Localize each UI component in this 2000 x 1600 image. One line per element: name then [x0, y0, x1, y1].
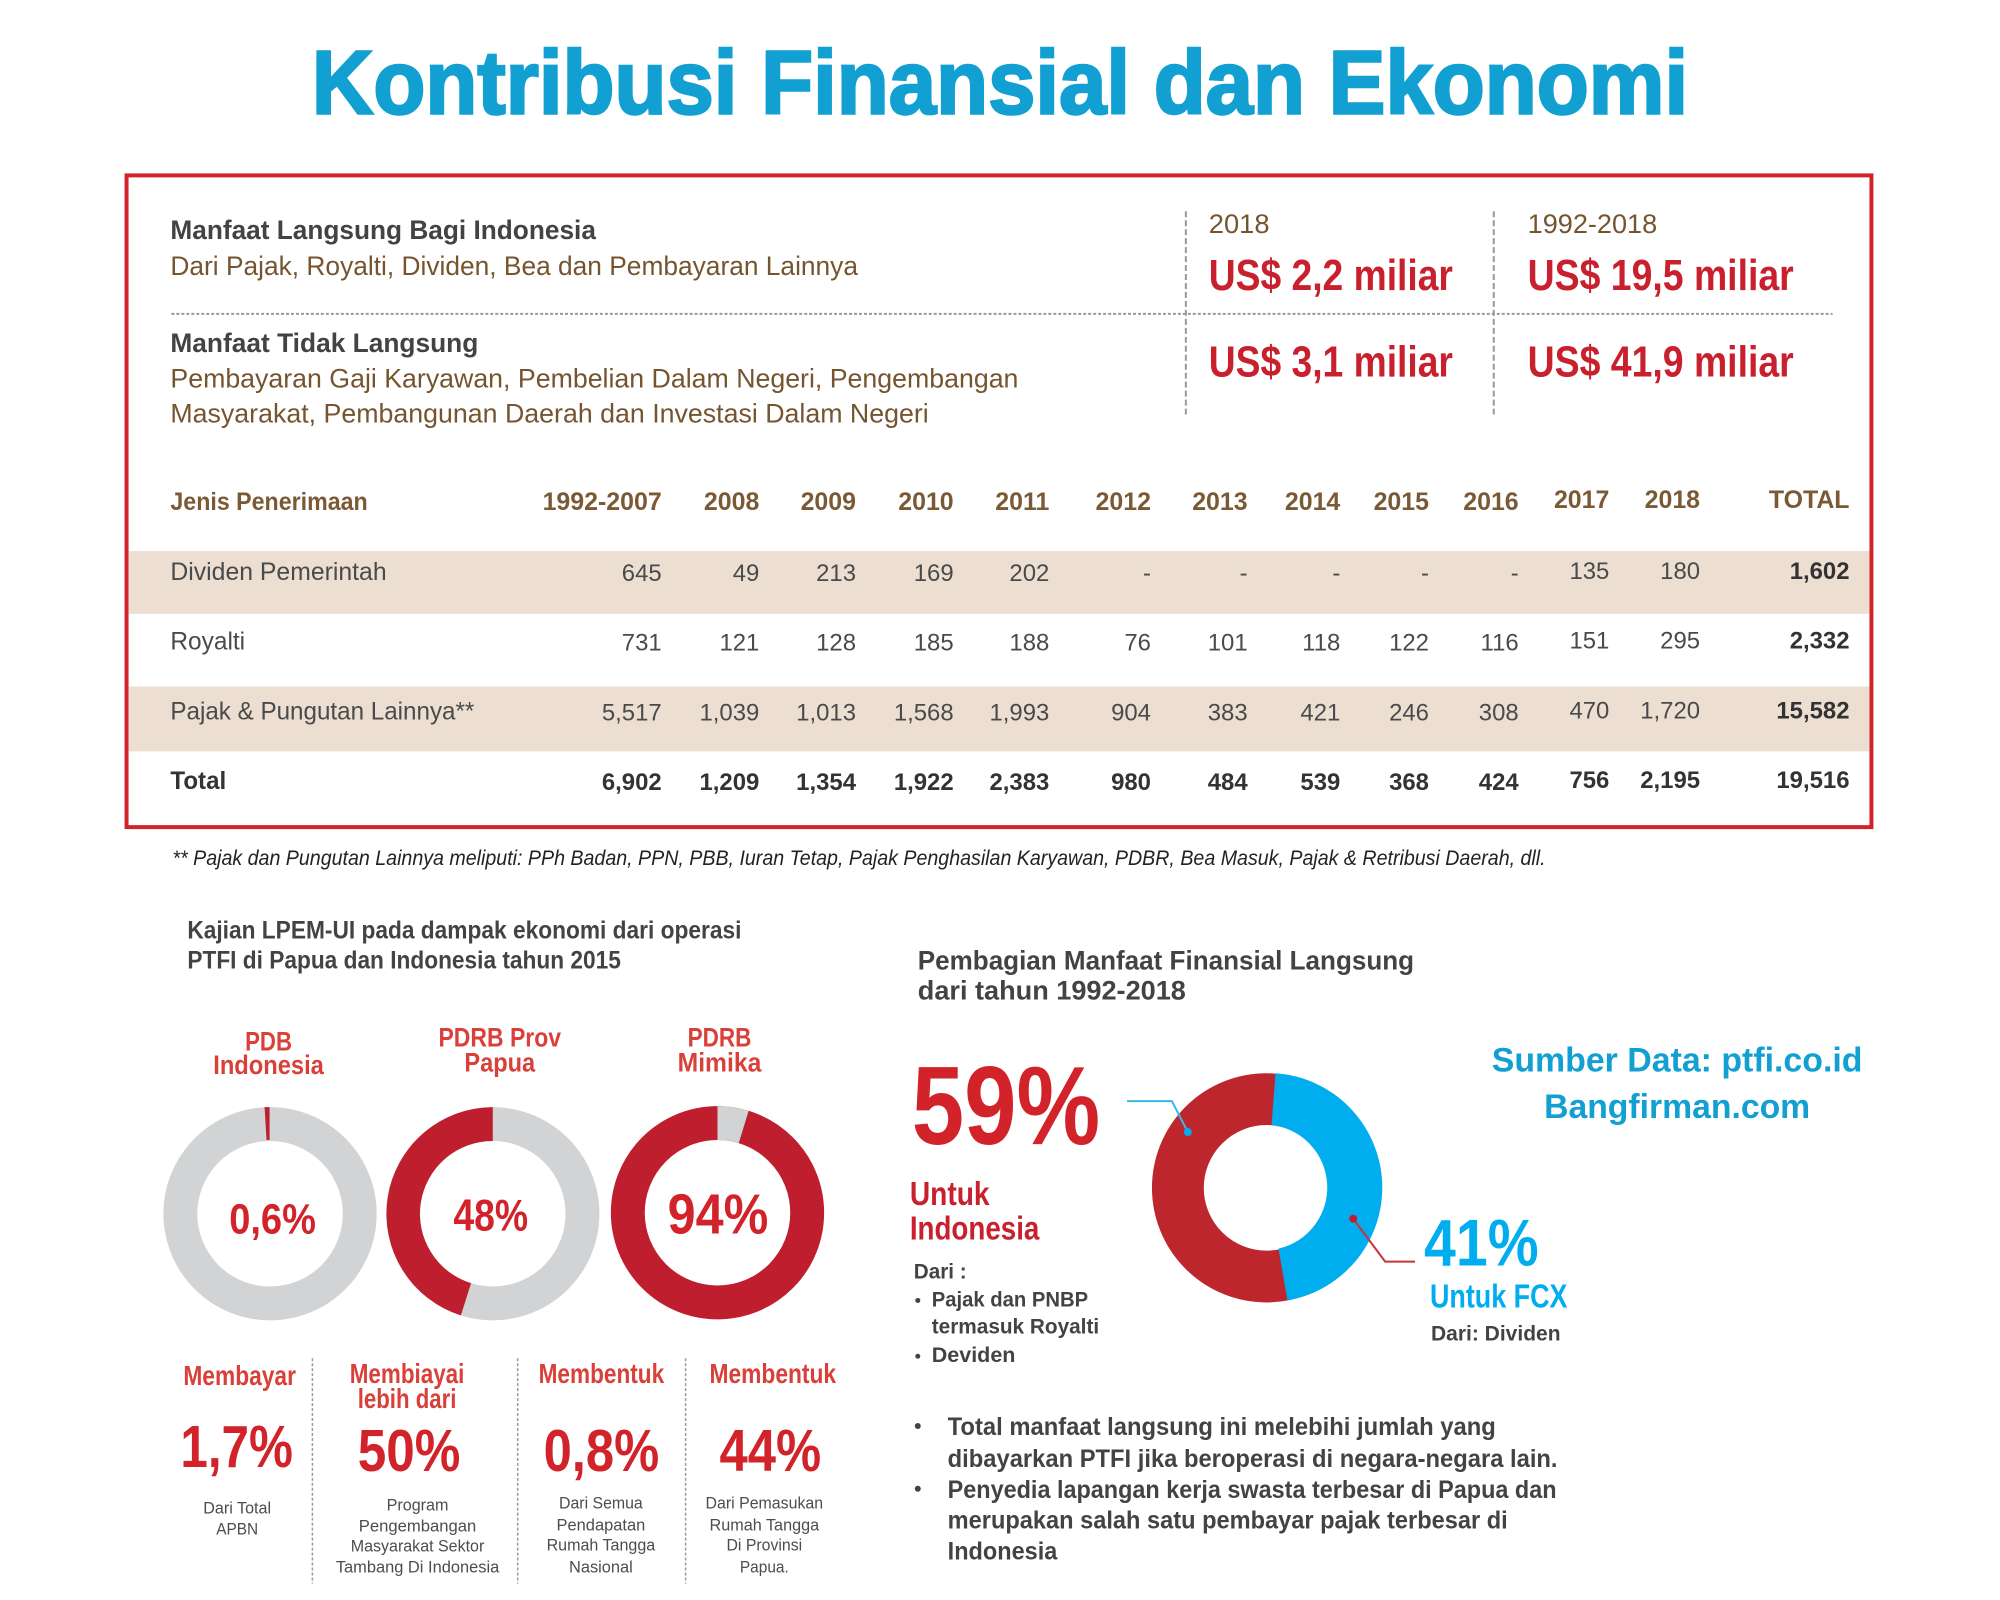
text block: indirect benefits	[170, 328, 1018, 429]
table header: 2009	[801, 488, 856, 516]
table row: dividen: -	[1332, 560, 1340, 587]
stat: 1,7% APBN: Dari Total	[203, 1499, 271, 1518]
text block: indirect benefits: Masyarakat, Pembangunan Daerah dan Investasi Dalam Negeri	[170, 399, 929, 429]
table row: total: 756	[1569, 767, 1609, 794]
table header: 2018	[1645, 486, 1700, 514]
stat: 44% Papua household income: 44%	[719, 1417, 821, 1484]
stat: 0,8% national household income: Rumah Tangga	[547, 1536, 656, 1555]
stat: 44% Papua household income: Membentuk	[710, 1358, 836, 1389]
stat: 0,8% national household income: Membentuk	[539, 1358, 665, 1389]
callout: 59% for Indonesia: Deviden	[932, 1344, 1015, 1367]
donut: PDB Indonesia 0,6%: PDB	[245, 1026, 292, 1056]
callout: 59% for Indonesia: 59%	[912, 1043, 1100, 1168]
callout: 59% for Indonesia: Dari :	[914, 1261, 967, 1284]
arrow: leader to blue segment	[1349, 1215, 1415, 1262]
stat: 44% Papua household income: Papua.	[740, 1557, 789, 1576]
table row: pajak: 15,582	[1776, 697, 1850, 724]
table row: dividen: -	[1511, 560, 1519, 587]
donut: PDB Indonesia 0,6%: 0,6%	[229, 1196, 316, 1244]
stat: 44% Papua household income: Dari Pemasukan	[706, 1494, 823, 1513]
stat: 50% program: Tambang Di Indonesia	[336, 1557, 500, 1576]
callout: 41% for FCX: 41%	[1424, 1206, 1539, 1280]
values: 2018	[1209, 209, 1453, 387]
donut: PDB Indonesia 0,6%: Indonesia	[213, 1050, 325, 1080]
table row: royalti: 128	[816, 630, 856, 657]
table header: 2014	[1285, 488, 1340, 516]
table row: royalti: Royalti	[170, 628, 245, 656]
heading: direct financial benefit split	[918, 946, 1414, 1006]
callout: 41% for FCX: Untuk FCX	[1430, 1277, 1568, 1314]
table header: 2011	[995, 488, 1049, 516]
table row: total: 484	[1208, 769, 1248, 796]
table row: pajak: 470	[1569, 697, 1609, 724]
donut: PDRB Mimika 94%: 94%	[668, 1184, 768, 1247]
donut: PDRB Prov Papua 48%: Papua	[464, 1047, 536, 1077]
row bands	[129, 551, 1869, 751]
table row: dividen: 213	[816, 560, 856, 587]
table row: pajak: 308	[1479, 699, 1519, 726]
table header: 2016	[1463, 488, 1519, 516]
text block: key points	[915, 1413, 1558, 1566]
values: 2018: 2018	[1209, 209, 1270, 239]
table row: dividen: -	[1143, 560, 1151, 587]
stat: 1,7% APBN: 1,7%	[180, 1413, 293, 1480]
table header: 2010	[898, 488, 954, 516]
table row: total: Total	[170, 767, 226, 795]
table header: 2015	[1374, 488, 1429, 516]
table row: dividen: 169	[914, 560, 954, 587]
callout: 59% for Indonesia: Indonesia	[910, 1210, 1040, 1247]
footnote: ** Pajak dan Pungutan Lainnya meliputi: PPh Badan, PPN, PBB, Iuran Tetap, Pajak Penghasilan Karyawan, PDBR, Bea Masuk, Pajak & Retribusi Daerah, dll.	[172, 847, 1546, 870]
stat: 0,8% national household income: 0,8%	[544, 1417, 659, 1484]
table row: royalti: 151	[1569, 628, 1609, 655]
table header: 2013	[1192, 488, 1248, 516]
arrow: leader to red segment	[1127, 1101, 1192, 1136]
callout: 59% for Indonesia: Pajak dan PNBP	[932, 1288, 1088, 1311]
table row: total: 6,902	[602, 769, 662, 796]
table row: pajak: Pajak & Pungutan Lainnya**	[170, 697, 475, 725]
values: 1992-2018: US$ 41,9 miliar	[1528, 338, 1794, 387]
table row: dividen: Dividen Pemerintah	[170, 558, 387, 586]
donut: PDRB Mimika 94%	[628, 1022, 807, 1302]
text block: indirect benefits: Manfaat Tidak Langsung	[170, 328, 478, 358]
table header: 2012	[1096, 488, 1151, 516]
text block: direct benefits	[170, 215, 858, 281]
table row: royalti: 121	[719, 630, 759, 657]
stat: 50% program	[336, 1358, 500, 1576]
table row: total	[170, 767, 1850, 796]
donut: PDRB Mimika 94%: PDRB	[688, 1022, 751, 1052]
table row: dividen	[170, 558, 1850, 587]
table row: total: 19,516	[1776, 767, 1850, 794]
heading: direct financial benefit split: Pembagian Manfaat Finansial Langsung	[918, 946, 1414, 976]
table row: pajak: 1,993	[989, 699, 1049, 726]
table header: 2017	[1554, 486, 1609, 514]
table row: total: 1,209	[700, 769, 759, 796]
text block: key points: Total manfaat langsung ini melebihi jumlah yang	[948, 1413, 1496, 1441]
text block: data source	[1492, 1041, 1862, 1126]
table row: royalti: 731	[622, 630, 662, 657]
stat: 44% Papua household income: Rumah Tangga	[710, 1516, 820, 1535]
callout: 59% for Indonesia: Untuk	[910, 1175, 990, 1212]
donut: PDB Indonesia 0,6%	[180, 1026, 360, 1303]
table row: royalti: 116	[1481, 630, 1519, 657]
table row: pajak: 246	[1389, 699, 1429, 726]
stat: 0,8% national household income: Nasional	[569, 1557, 633, 1576]
donut: PDRB Mimika 94%: Mimika	[678, 1047, 762, 1077]
table row: royalti: 295	[1660, 628, 1700, 655]
values: 2018: US$ 3,1 miliar	[1209, 338, 1453, 387]
table row: total: 2,383	[989, 769, 1049, 796]
donut: PDRB Prov Papua 48%: PDRB Prov	[438, 1022, 561, 1052]
table row: royalti: 2,332	[1790, 628, 1850, 655]
table row: dividen: 180	[1660, 558, 1700, 585]
heading: LPEM-UI study	[187, 917, 741, 975]
stat: 1,7% APBN: APBN	[216, 1520, 258, 1539]
text block: data source: Sumber Data: ptfi.co.id	[1492, 1041, 1862, 1079]
stat: 0,8% national household income: Dari Semua	[559, 1494, 643, 1513]
stat: 44% Papua household income: Di Provinsi	[726, 1536, 802, 1555]
table row: total: 1,354	[796, 769, 857, 796]
values: 1992-2018: US$ 19,5 miliar	[1528, 251, 1794, 300]
callout: 41% for FCX	[1424, 1206, 1568, 1345]
donut: PDRB Prov Papua 48%	[386, 1022, 582, 1315]
stat: 1,7% APBN: Membayar	[183, 1360, 296, 1391]
stat: 50% program: Program	[387, 1496, 448, 1515]
text block: key points: merupakan salah satu pembayar pajak terbesar di	[948, 1507, 1508, 1535]
donut: PDRB Prov Papua 48%: 48%	[453, 1190, 528, 1241]
text block: indirect benefits: Pembayaran Gaji Karyawan, Pembelian Dalam Negeri, Pengembangan	[170, 364, 1018, 394]
table row: dividen: -	[1240, 560, 1248, 587]
table row: dividen: 202	[1009, 560, 1049, 587]
callout: 59% for Indonesia	[910, 1043, 1100, 1367]
panel: financial table	[127, 175, 1871, 827]
table row: dividen: 49	[733, 560, 759, 587]
table row: total: 980	[1111, 769, 1151, 796]
table header: Jenis Penerimaan	[170, 488, 368, 516]
table header: 2008	[704, 488, 759, 516]
stat: 44% Papua household income	[706, 1358, 836, 1576]
stat: 50% program: Pengembangan	[359, 1517, 476, 1536]
table row: pajak: 383	[1208, 699, 1248, 726]
table row: pajak: 5,517	[602, 699, 662, 726]
table row: royalti	[170, 628, 1850, 657]
text block: data source: Bangfirman.com	[1544, 1088, 1810, 1126]
stat: 0,8% national household income	[539, 1358, 665, 1576]
table row: royalti: 122	[1389, 630, 1429, 657]
text block: direct benefits: Manfaat Langsung Bagi Indonesia	[170, 215, 597, 245]
stat: 1,7% APBN	[180, 1360, 296, 1539]
text block: key points: dibayarkan PTFI jika beroperasi di negara-negara lain.	[948, 1445, 1558, 1473]
callout: 59% for Indonesia: termasuk Royalti	[932, 1315, 1099, 1338]
table row: royalti: 118	[1302, 630, 1340, 657]
table row: pajak: 1,013	[796, 699, 856, 726]
values: 2018: US$ 2,2 miliar	[1209, 251, 1453, 300]
table row: royalti: 101	[1208, 630, 1248, 657]
table row: pajak: 904	[1111, 699, 1151, 726]
table row: royalti: 188	[1009, 630, 1049, 657]
table header: 1992-2007	[543, 488, 662, 516]
table row: total: 1,922	[894, 769, 954, 796]
values: 1992-2018: 1992-2018	[1528, 209, 1657, 239]
text block: direct benefits: Dari Pajak, Royalti, Dividen, Bea dan Pembayaran Lainnya	[170, 251, 858, 281]
table row: dividen: 135	[1569, 558, 1609, 585]
stat: 50% program: Membiayai	[350, 1358, 464, 1389]
stat: 50% program: lebih dari	[358, 1383, 456, 1414]
heading: direct financial benefit split: dari tahun 1992-2018	[918, 976, 1186, 1006]
text block: key points: Penyedia lapangan kerja swasta terbesar di Papua dan	[948, 1476, 1557, 1504]
table row: royalti: 185	[914, 630, 954, 657]
table row: pajak: 1,568	[894, 699, 954, 726]
table row: dividen: -	[1421, 560, 1429, 587]
table row: total: 2,195	[1640, 767, 1700, 794]
stat: 0,8% national household income: Pendapatan	[557, 1516, 645, 1535]
table row: dividen: 645	[622, 560, 662, 587]
table header: TOTAL	[1769, 486, 1850, 514]
title: Kontribusi Finansial dan Ekonomi	[312, 34, 1688, 134]
table row: total: 368	[1389, 769, 1429, 796]
table row: pajak: 1,039	[700, 699, 759, 726]
stat: 50% program: Masyarakat Sektor	[351, 1537, 485, 1556]
table row: total: 424	[1479, 769, 1519, 796]
callout: 41% for FCX: Dari: Dividen	[1431, 1322, 1561, 1345]
table row: pajak	[170, 697, 1850, 726]
table row: pajak: 1,720	[1640, 697, 1700, 724]
text block: key points: Indonesia	[948, 1538, 1058, 1566]
table header	[170, 486, 1850, 516]
stat: 50% program: 50%	[358, 1417, 460, 1484]
table row: pajak: 421	[1300, 699, 1340, 726]
table row: dividen: 1,602	[1790, 558, 1850, 585]
table row: total: 539	[1300, 769, 1340, 796]
heading: LPEM-UI study: Kajian LPEM-UI pada dampak ekonomi dari operasi	[187, 917, 741, 945]
heading: LPEM-UI study: PTFI di Papua dan Indonesia tahun 2015	[187, 947, 621, 975]
donut: 59 / 41 split	[1178, 1073, 1382, 1300]
values: 1992-2018	[1528, 209, 1794, 387]
table row: royalti: 76	[1124, 630, 1151, 657]
